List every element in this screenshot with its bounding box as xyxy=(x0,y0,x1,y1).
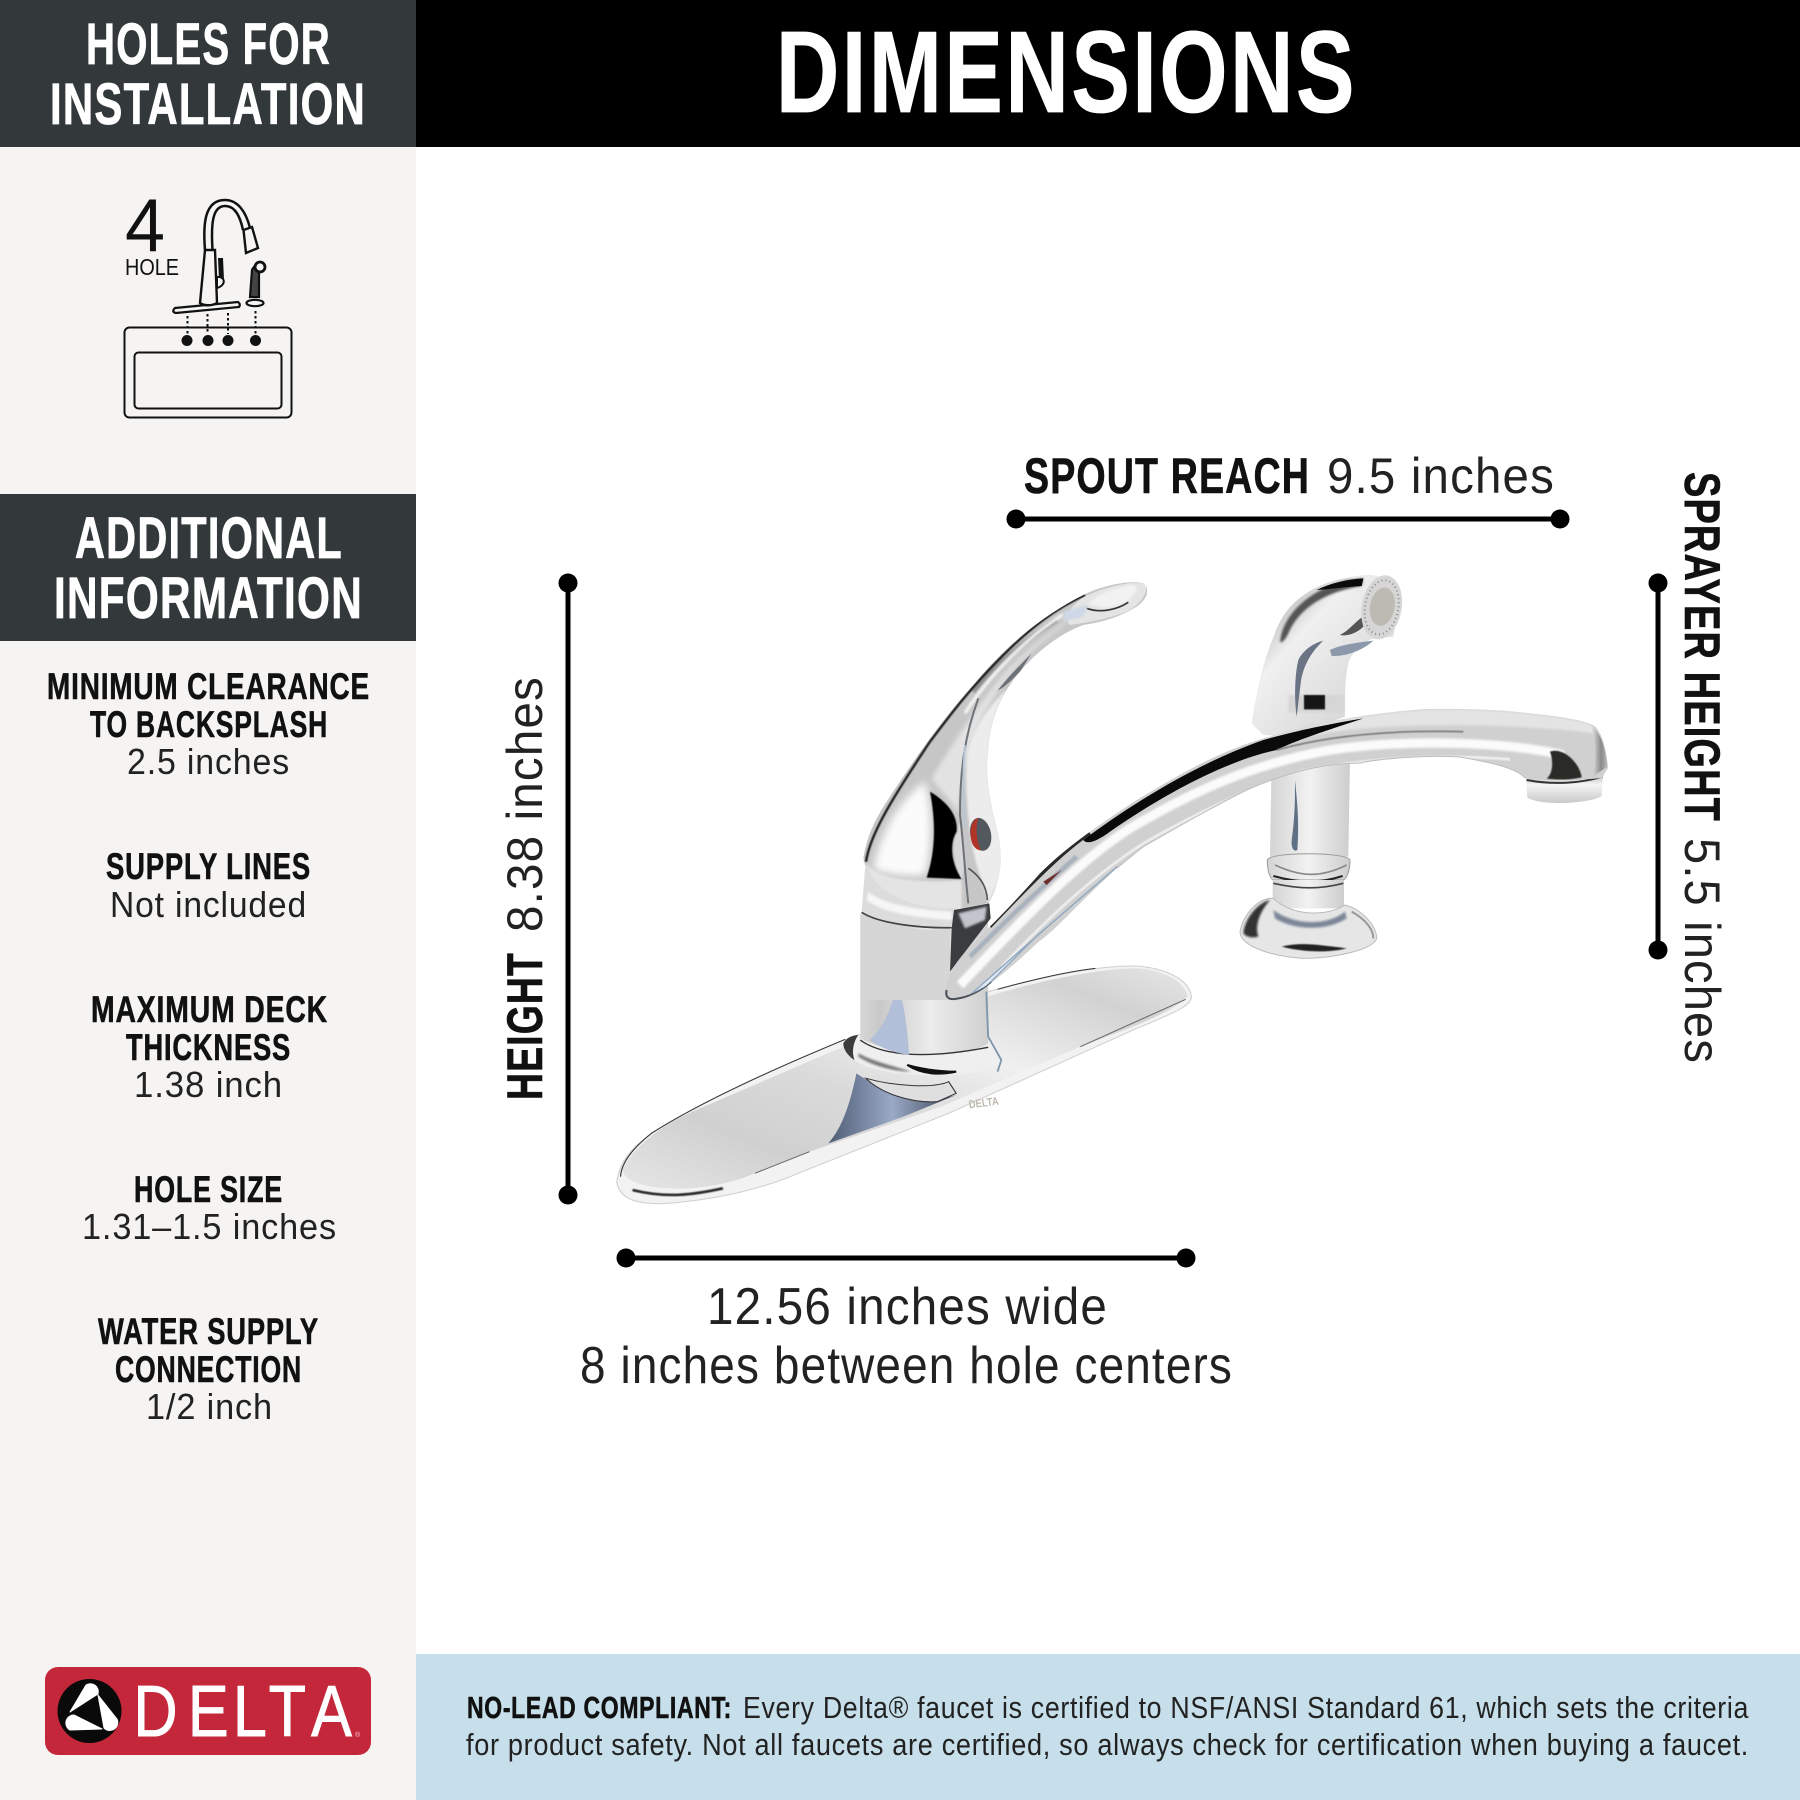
heading: dimensions: DIMENSIONS xyxy=(776,7,1357,137)
text block: hole size xyxy=(82,1169,337,1247)
text block: minimum clearance xyxy=(47,666,370,782)
heading: additional information: ADDITIONAL xyxy=(75,506,343,571)
faucet: handle xyxy=(850,575,1170,972)
label: sprayer height: SPRAYER HEIGHT xyxy=(1674,472,1730,822)
text block: supply lines: SUPPLY LINES xyxy=(106,846,311,887)
label: spout reach: 9.5 inches xyxy=(1327,448,1555,504)
text block: water supply connection: 1/2 inch xyxy=(146,1386,273,1427)
icon: 4 hole sink installation: 4 xyxy=(125,183,165,267)
faucet: mounting collar and body xyxy=(843,912,1001,1075)
label: spout reach: SPOUT REACH xyxy=(1024,448,1310,504)
text block: maximum deck thickness: 1.38 inch xyxy=(134,1064,283,1105)
label: sprayer height: 5.5 inches xyxy=(1674,838,1730,1064)
icon: 4 hole sink installation xyxy=(124,183,292,418)
logo: delta: ® xyxy=(355,1731,361,1739)
arrow: height dimension line xyxy=(558,574,578,1204)
faucet: spout xyxy=(930,700,1617,1007)
heading: dimensions xyxy=(416,0,1800,147)
panel: no-lead compliant note xyxy=(416,1654,1800,1800)
label: height xyxy=(497,676,553,1100)
text block: hole size: HOLE SIZE xyxy=(134,1169,283,1210)
text block: water supply connection xyxy=(98,1311,319,1427)
text block: water supply connection: WATER SUPPLY xyxy=(98,1311,319,1352)
arrow: width dimension line xyxy=(616,1248,1196,1268)
faucet: deck plate xyxy=(617,966,1191,1204)
heading: additional information: INFORMATION xyxy=(54,566,363,631)
faucet: deck plate: DELTA xyxy=(968,1094,1000,1111)
heading: holes for installation: INSTALLATION xyxy=(50,72,366,137)
text block: hole size: 1.31–1.5 inches xyxy=(82,1206,337,1247)
text block: minimum clearance: TO BACKSPLASH xyxy=(90,704,328,745)
panel: no-lead compliant note: NO-LEAD COMPLIANT: xyxy=(467,1690,732,1725)
icon: 4 hole sink installation: HOLE xyxy=(125,254,179,280)
label: height: HEIGHT xyxy=(497,952,553,1100)
label: height: 8.38 inches xyxy=(497,676,553,932)
label: width and hole centers xyxy=(580,1278,1233,1395)
logo: delta xyxy=(45,1667,371,1755)
logo: delta: DELTA xyxy=(133,1672,352,1752)
faucet: aerator xyxy=(1522,767,1603,803)
arrow: spout reach dimension line xyxy=(1006,510,1570,528)
arrow: sprayer height dimension line xyxy=(1648,574,1668,960)
text block: minimum clearance: 2.5 inches xyxy=(127,741,290,782)
heading: holes for installation: HOLES FOR xyxy=(86,12,331,77)
heading: additional information xyxy=(0,494,416,641)
faucet: sprayer xyxy=(1240,572,1407,958)
text block: minimum clearance: MINIMUM CLEARANCE xyxy=(47,666,370,707)
text block: maximum deck thickness xyxy=(91,989,328,1105)
panel: sidebar background xyxy=(0,0,416,1800)
text block: maximum deck thickness: THICKNESS xyxy=(126,1027,291,1068)
label: width and hole centers: 12.56 inches wide xyxy=(707,1278,1108,1336)
text block: supply lines xyxy=(106,846,311,925)
heading: holes for installation xyxy=(0,0,416,147)
label: width and hole centers: 8 inches between hole centers xyxy=(580,1337,1233,1395)
text block: supply lines: Not included xyxy=(110,884,307,925)
text block: water supply connection: CONNECTION xyxy=(115,1349,302,1390)
text block: maximum deck thickness: MAXIMUM DECK xyxy=(91,989,328,1030)
